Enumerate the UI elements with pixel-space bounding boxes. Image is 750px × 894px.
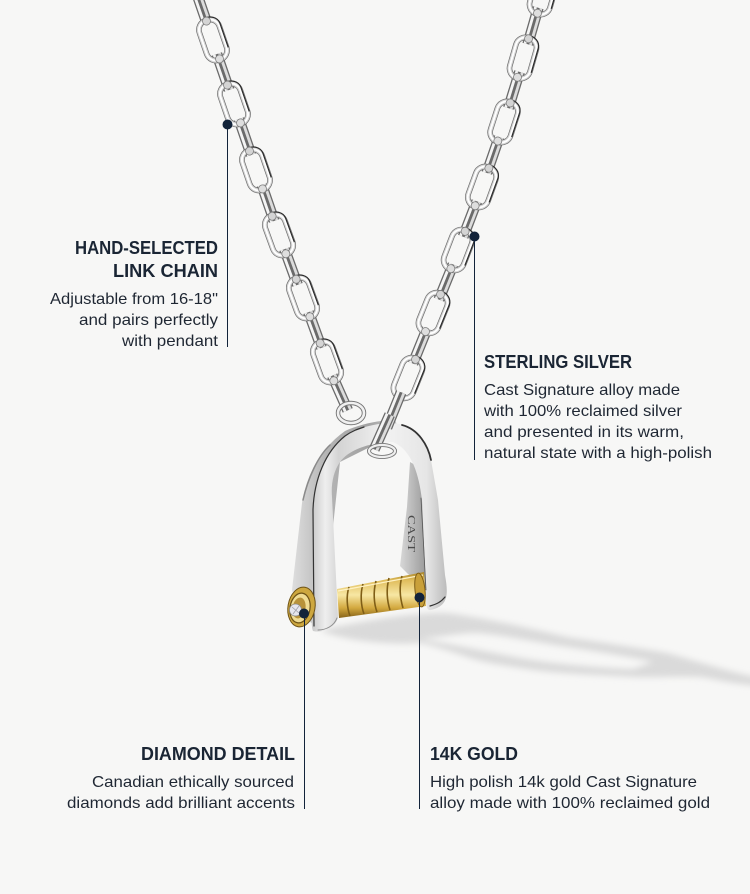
description: Adjustable from 16-18" xyxy=(50,291,218,308)
pendant xyxy=(285,390,447,632)
heading: STERLING SILVER xyxy=(484,352,632,372)
callout: 14k gold xyxy=(414,592,710,812)
callout: diamond detail xyxy=(67,608,309,812)
description: natural state with a high-polish xyxy=(484,445,712,462)
left side wing of bail xyxy=(292,420,400,628)
pointer line and dot xyxy=(222,120,232,347)
description: Canadian ethically sourced xyxy=(92,774,294,791)
callout: hand-selected link chain xyxy=(50,120,232,350)
pointer line and dot xyxy=(470,232,480,460)
cast shadow of pendant xyxy=(320,613,750,686)
silver stirrup front xyxy=(312,423,447,632)
heading: HAND-SELECTED xyxy=(75,238,218,258)
stirrup edge lines xyxy=(303,425,445,630)
callout: sterling silver xyxy=(470,232,712,462)
description: diamonds add brilliant accents xyxy=(67,795,295,812)
engraved CAST mark: CAST xyxy=(405,515,417,552)
pointer line and dot xyxy=(299,608,309,809)
heading: LINK CHAIN xyxy=(113,261,218,281)
description: alloy made with 100% reclaimed gold xyxy=(430,795,710,812)
gold end cap with diamond xyxy=(285,585,318,629)
heading xyxy=(75,238,218,281)
description: Cast Signature alloy made xyxy=(484,382,680,399)
heading: DIAMOND DETAIL xyxy=(141,744,295,764)
heading: 14K GOLD xyxy=(430,744,518,764)
description: High polish 14k gold Cast Signature xyxy=(430,774,697,791)
description: and presented in its warm, xyxy=(484,424,684,441)
bail lower ring xyxy=(369,445,395,457)
right side wing of bail xyxy=(400,462,430,592)
gold barrel xyxy=(337,572,427,618)
description: with pendant xyxy=(121,333,219,350)
left chain xyxy=(190,0,364,423)
description xyxy=(50,291,219,350)
pointer line and dot xyxy=(414,592,424,809)
right chain xyxy=(389,0,561,405)
description xyxy=(483,382,712,462)
description: and pairs perfectly xyxy=(79,312,218,329)
description xyxy=(67,774,295,812)
description xyxy=(430,774,710,812)
left bail ring xyxy=(338,403,364,423)
description: with 100% reclaimed silver xyxy=(483,403,683,420)
bail connector links xyxy=(382,390,406,430)
